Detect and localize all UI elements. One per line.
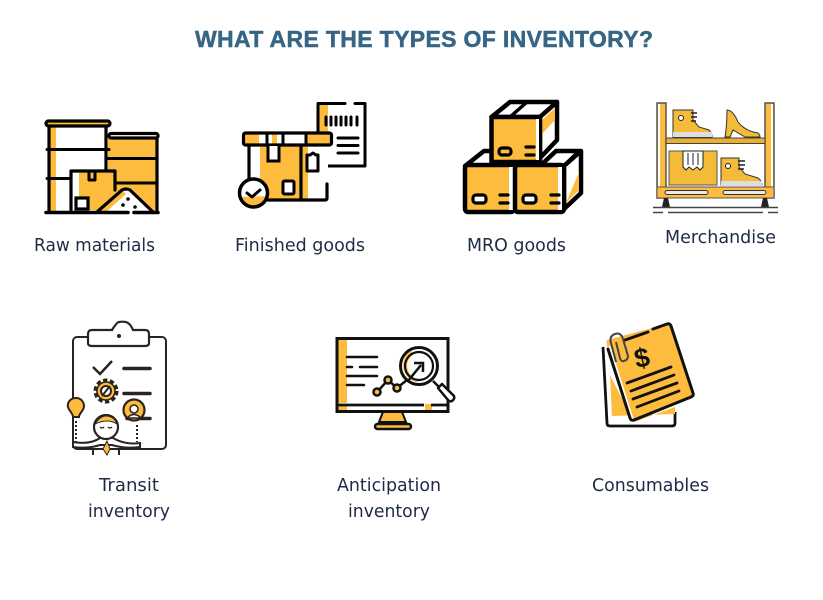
icon: consumables xyxy=(603,324,693,426)
icon: finished goods xyxy=(240,103,365,207)
label: anticipation inventory: inventory xyxy=(348,501,430,522)
label: transit inventory xyxy=(88,475,170,522)
label: transit inventory: Transit xyxy=(98,475,159,496)
label: anticipation inventory: Anticipation xyxy=(337,475,441,496)
label: finished goods: Finished goods xyxy=(235,235,365,256)
title: WHAT ARE THE TYPES OF INVENTORY? xyxy=(195,26,653,52)
icon: MRO goods xyxy=(465,102,581,212)
label: consumables: Consumables xyxy=(592,475,709,496)
label: merchandise: Merchandise xyxy=(665,227,776,248)
label: raw materials: Raw materials xyxy=(34,235,155,256)
icon: consumables: $ xyxy=(632,342,652,374)
icon: raw materials xyxy=(46,121,158,212)
label: MRO goods: MRO goods xyxy=(467,235,566,256)
icon: transit inventory xyxy=(68,322,166,455)
icon: merchandise xyxy=(653,103,778,212)
label: anticipation inventory xyxy=(337,475,441,522)
icon: anticipation inventory xyxy=(337,338,454,429)
label: transit inventory: inventory xyxy=(88,501,170,522)
